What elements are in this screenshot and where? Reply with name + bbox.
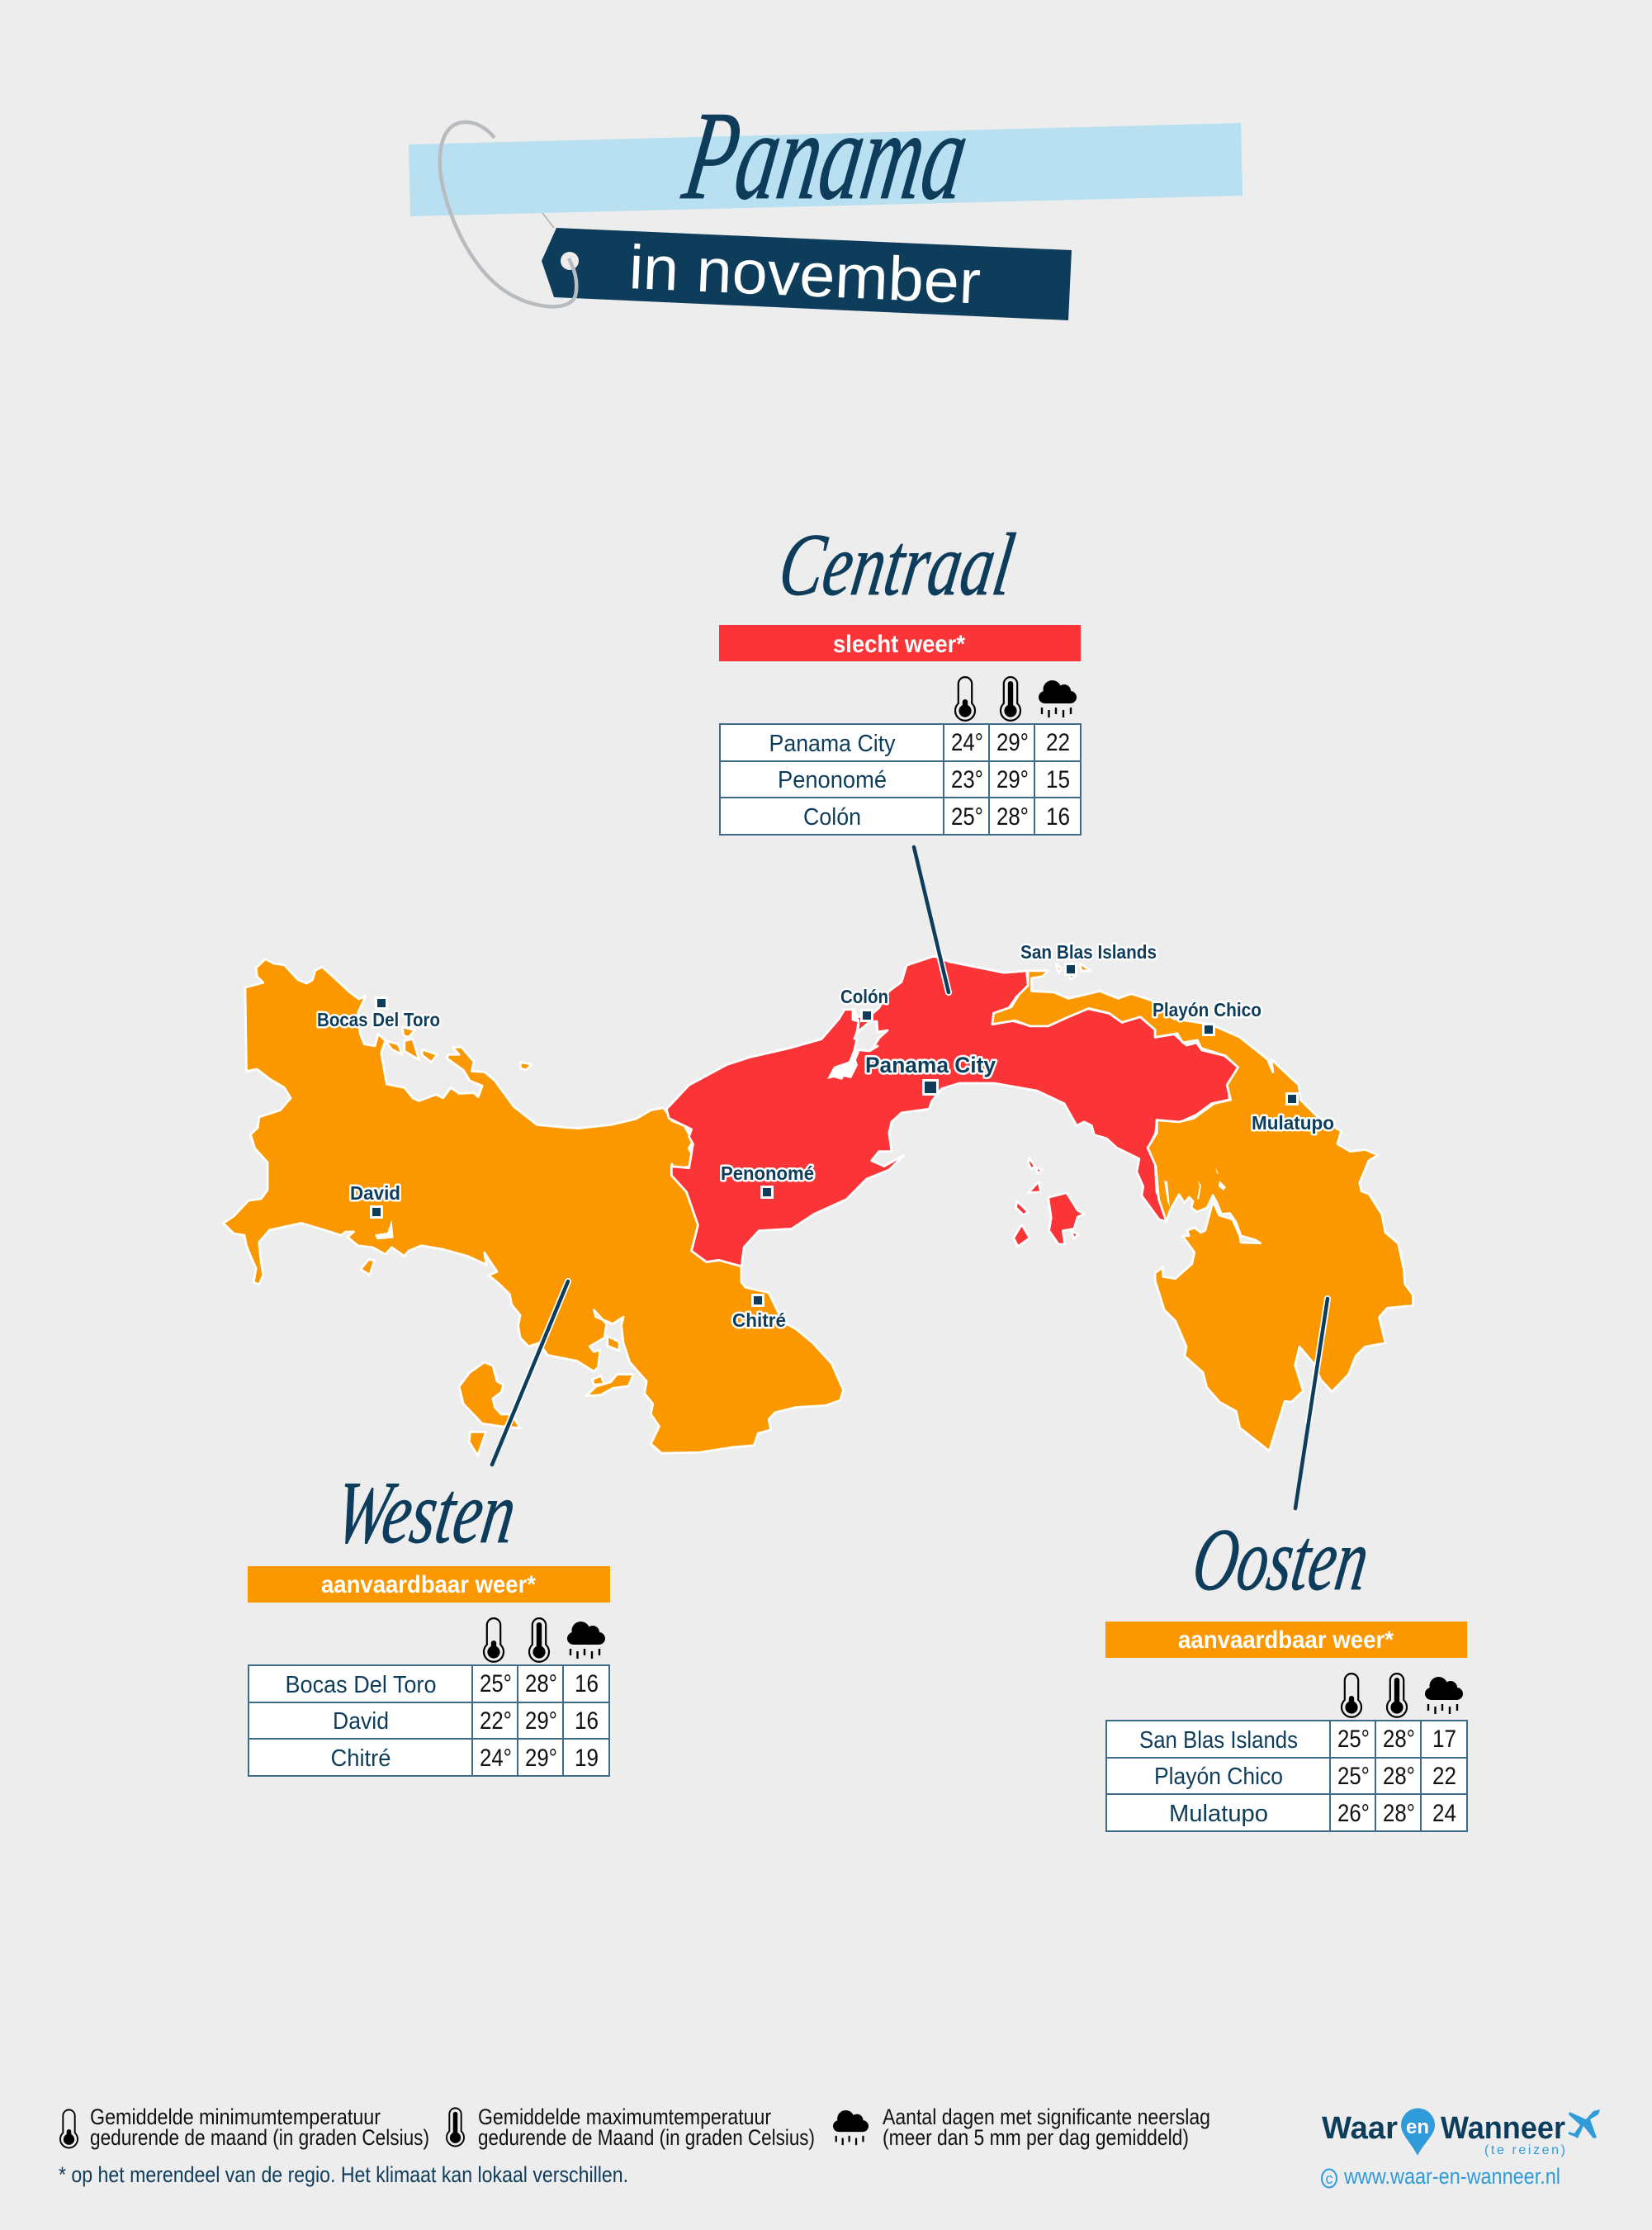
table: Oosten: 25°: [1337, 1763, 1370, 1790]
city: Panama City: Panama City: [865, 1053, 996, 1077]
legend text: rain: [883, 2105, 1210, 2150]
city: Playón Chico: [1153, 999, 1261, 1036]
table: Westen: 19: [575, 1745, 599, 1772]
weather bar: slecht weer: [719, 625, 1081, 661]
legend text: rain: (meer dan 5 mm per dag gemiddeld): [883, 2125, 1189, 2150]
gulf slits: [1164, 1167, 1226, 1207]
legend icon: minimum temperature: [60, 2109, 78, 2147]
weather bar: aanvaardbaar weer: [248, 1566, 610, 1603]
city: Panama City: [865, 1053, 996, 1096]
icon: maximum temperature: [529, 1618, 549, 1662]
icon: copyright: [1322, 2170, 1337, 2188]
tagline: (te reizen): [1484, 2143, 1565, 2157]
table: Centraal: 29°: [996, 766, 1029, 793]
table: Westen: [249, 1665, 609, 1776]
table: Centraal: [720, 724, 1081, 835]
panel: Centraal: [719, 515, 1081, 835]
table: Westen: Chitré: [330, 1745, 391, 1772]
table: Centraal: Colón: [803, 804, 861, 831]
region: west (orange): [223, 959, 843, 1456]
table: Oosten: 28°: [1383, 1763, 1415, 1790]
city: Mulatupo: [1252, 1092, 1334, 1134]
table: Westen: 24°: [480, 1745, 512, 1772]
icon: map pin: [1401, 2109, 1435, 2156]
table: Westen: David: [333, 1708, 389, 1735]
table: Centraal: Penonomé: [778, 767, 887, 793]
city: David: [350, 1182, 400, 1219]
footnote: * op het merendeel van de regio. Het klimaat kan lokaal verschillen.: [59, 2162, 628, 2187]
table: Westen: 28°: [525, 1670, 557, 1697]
city: Bocas Del Toro: [317, 997, 440, 1030]
string of the tag: [542, 213, 554, 228]
website: www.waar-en-wanneer.nl: [1343, 2164, 1560, 2189]
table: Centraal: Panama City: [769, 731, 896, 757]
region: Pearl Islands (red): [1014, 1158, 1084, 1247]
weather bar: aanvaardbaar weer: aanvaardbaar weer*: [1178, 1626, 1394, 1654]
legend text: minimum temperature: Gemiddelde minimumtemperatuur: [90, 2105, 381, 2129]
table: Oosten: 25°: [1337, 1726, 1370, 1753]
heading: Oosten: Oosten: [1186, 1510, 1375, 1609]
table: Centraal: 25°: [951, 803, 983, 831]
table: Oosten: Playón Chico: [1154, 1764, 1283, 1790]
icon: maximum temperature: [1001, 677, 1020, 721]
table: Centraal: 15: [1046, 766, 1070, 793]
logo: Waar en Wanneer: [1322, 2109, 1600, 2189]
icon: minimum temperature: [1342, 1674, 1361, 1717]
title: Panama: Panama: [675, 85, 977, 226]
icon: maximum temperature: [1387, 1674, 1407, 1717]
legend text: minimum temperature: [90, 2105, 429, 2150]
city: David: David: [350, 1182, 400, 1204]
city: Chitré: [732, 1294, 786, 1331]
wordmark: Waar: Waar: [1322, 2111, 1398, 2146]
table: Westen: 16: [575, 1670, 599, 1697]
table: Oosten: 24: [1432, 1800, 1456, 1827]
city: Colón: [840, 986, 888, 1022]
table: Centraal: 22: [1046, 729, 1070, 756]
city markers and labels: [317, 941, 1334, 1331]
city: Penonomé: Penonomé: [721, 1162, 814, 1184]
city: San Blas Islands: [1020, 941, 1157, 976]
panel: Oosten: [1105, 1510, 1467, 1831]
weather bar: aanvaardbaar weer: aanvaardbaar weer*: [321, 1571, 536, 1598]
city: Penonomé: [721, 1162, 814, 1199]
title band: [409, 123, 1243, 216]
word: en: en: [1406, 2116, 1429, 2138]
tag: [542, 228, 1072, 320]
legend text: maximum temperature: gedurende de Maand (in graden Celsius): [478, 2125, 815, 2150]
icon: airplane: [1569, 2109, 1600, 2138]
legend text: maximum temperature: [478, 2105, 815, 2150]
table: Westen: 25°: [480, 1670, 512, 1697]
legend text: minimum temperature: gedurende de maand (in graden Celsius): [90, 2125, 429, 2150]
table: Oosten: 28°: [1383, 1800, 1415, 1827]
weather bar: aanvaardbaar weer: [1105, 1622, 1467, 1658]
tag ring: [440, 122, 576, 306]
table: Centraal: 24°: [951, 729, 983, 756]
icon: minimum temperature: [955, 677, 975, 721]
table: Oosten: San Blas Islands: [1139, 1727, 1298, 1754]
table: Centraal: 23°: [951, 766, 983, 793]
table: Oosten: 17: [1432, 1726, 1456, 1753]
table: Oosten: 26°: [1337, 1800, 1370, 1827]
title block: [409, 85, 1243, 320]
city: San Blas Islands: San Blas Islands: [1020, 941, 1157, 963]
weather bar: slecht weer: slecht weer*: [833, 631, 965, 658]
heading: Centraal: Centraal: [773, 515, 1020, 614]
panel: Westen: [248, 1463, 610, 1776]
leader lines: [492, 847, 1328, 1508]
icon: rain: [1425, 1677, 1463, 1714]
table: Centraal: 16: [1046, 803, 1070, 831]
heading: Westen: Westen: [329, 1463, 523, 1562]
region: east (orange): [992, 963, 1413, 1451]
lake arms: [827, 1050, 859, 1080]
city: Colón: Colón: [840, 986, 888, 1007]
table: Westen: 29°: [525, 1745, 557, 1772]
table: Westen: 16: [575, 1707, 599, 1735]
legend text: rain: Aantal dagen met significante neerslag: [883, 2105, 1210, 2129]
table: Oosten: 22: [1432, 1763, 1456, 1790]
legend icon: maximum temperature: [447, 2108, 464, 2146]
icon: rain: [567, 1622, 605, 1659]
city: Chitré: Chitré: [732, 1309, 786, 1331]
legend icon: rain: [833, 2110, 869, 2145]
map: [223, 956, 1413, 1456]
legend: [59, 2105, 1210, 2187]
table: Oosten: Mulatupo: [1169, 1801, 1268, 1827]
lake: Gatun: [850, 1010, 888, 1061]
city: Bocas Del Toro: Bocas Del Toro: [317, 1009, 440, 1030]
legend text: maximum temperature: Gemiddelde maximumtemperatuur: [478, 2105, 771, 2129]
icon: copyright: c: [1326, 2171, 1332, 2187]
subtitle: in november: in november: [627, 232, 982, 317]
table: Westen: 29°: [525, 1707, 557, 1735]
table: Westen: 22°: [480, 1707, 512, 1735]
region: central (red): [666, 956, 1239, 1267]
tag hole: [561, 252, 579, 270]
table: Centraal: 29°: [996, 729, 1029, 756]
table: Centraal: 28°: [996, 803, 1029, 831]
table: Westen: Bocas Del Toro: [286, 1672, 436, 1698]
icon: minimum temperature: [484, 1618, 504, 1662]
wordmark: Wanneer: Wanneer: [1441, 2111, 1565, 2146]
city: Mulatupo: Mulatupo: [1252, 1112, 1334, 1134]
icon: rain: [1039, 680, 1077, 717]
table: Oosten: 28°: [1383, 1726, 1415, 1753]
table: Oosten: [1106, 1721, 1467, 1831]
city: Playón Chico: Playón Chico: [1153, 999, 1261, 1020]
